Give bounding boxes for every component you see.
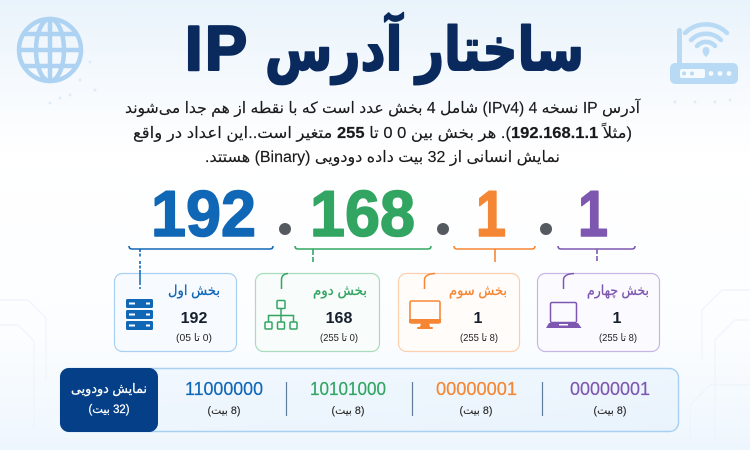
panel: part one <box>114 273 236 352</box>
panel: part four <box>538 274 660 352</box>
separator dot <box>279 223 291 235</box>
part one range: (0 تا 05) <box>176 332 212 344</box>
IP octet: 192: 192 <box>151 177 256 250</box>
part two range: (0 تا 255) <box>320 332 358 344</box>
binary value: third octet: 00000001 <box>436 379 517 399</box>
panel: part three <box>398 274 520 352</box>
binary value: first octet: 11000000 <box>185 379 263 399</box>
part three heading: بخش سوم <box>449 282 507 299</box>
binary value: first octet: (8 بیت) <box>208 405 240 417</box>
intro paragraph: آدرس IP نسخه 4 (IPv4) شامل 4 بخش عدد است که با نقطه از هم جدا می‌شوند <box>125 98 641 117</box>
intro paragraph: نمایش انسانی از 32 بیت داده دودویی (Binary) هستتد. <box>205 149 560 167</box>
binary label box <box>60 368 158 432</box>
binary value: first octet <box>185 379 263 417</box>
icon: laptop <box>546 302 582 328</box>
icon: wifi router <box>670 24 738 84</box>
IP octet: 1 orange: 1 <box>476 177 506 250</box>
part two heading: بخش دوم <box>313 282 367 299</box>
bracket: purple <box>558 246 635 262</box>
separator dot <box>540 223 552 235</box>
binary value: fourth octet: 00000001 <box>570 379 650 399</box>
binary label box: نمایش دودویی <box>71 381 147 397</box>
binary value: second octet: 10101000 <box>310 379 386 399</box>
binary label box: (32 بیت) <box>88 404 130 416</box>
part three value: 1 <box>474 310 483 327</box>
intro paragraph: (مثلاً 192.168.1.1). هر بخش بین 0 0 تا 255 متغیر است..این اعداد در واقع <box>133 123 632 143</box>
binary value: second octet <box>310 379 386 417</box>
binary value: fourth octet <box>570 379 650 417</box>
icon: monitor <box>409 301 441 329</box>
title: ساختار آدرس <box>265 12 584 85</box>
panel: binary representation <box>60 368 678 432</box>
part four value: 1 <box>613 310 622 327</box>
bracket: orange <box>454 246 535 262</box>
intro paragraph <box>125 98 641 167</box>
part four range: (8 تا 255) <box>599 332 637 344</box>
bracket: green <box>295 246 431 262</box>
IP octet: 1 purple: 1 <box>578 177 608 250</box>
title <box>185 12 584 85</box>
panel: part two <box>256 274 380 352</box>
part one value: 192 <box>181 310 207 327</box>
icon: globe <box>19 19 81 81</box>
part one heading: بخش اول <box>168 282 220 299</box>
icon: network tree <box>265 300 297 329</box>
IP octet: 168: 168 <box>310 177 415 250</box>
part four heading: بخش چهارم <box>587 282 649 299</box>
binary value: second octet: (8 بیت) <box>332 405 364 417</box>
part two value: 168 <box>326 310 352 327</box>
bracket: blue <box>129 246 273 273</box>
part three range: (8 تا 255) <box>460 332 498 344</box>
binary value: third octet: (8 بیت) <box>460 405 492 417</box>
binary value: fourth octet: (8 بیت) <box>594 405 626 417</box>
separator dot <box>437 223 449 235</box>
title: IP <box>185 14 247 84</box>
icon: server <box>126 299 153 330</box>
binary value: third octet <box>436 379 517 417</box>
